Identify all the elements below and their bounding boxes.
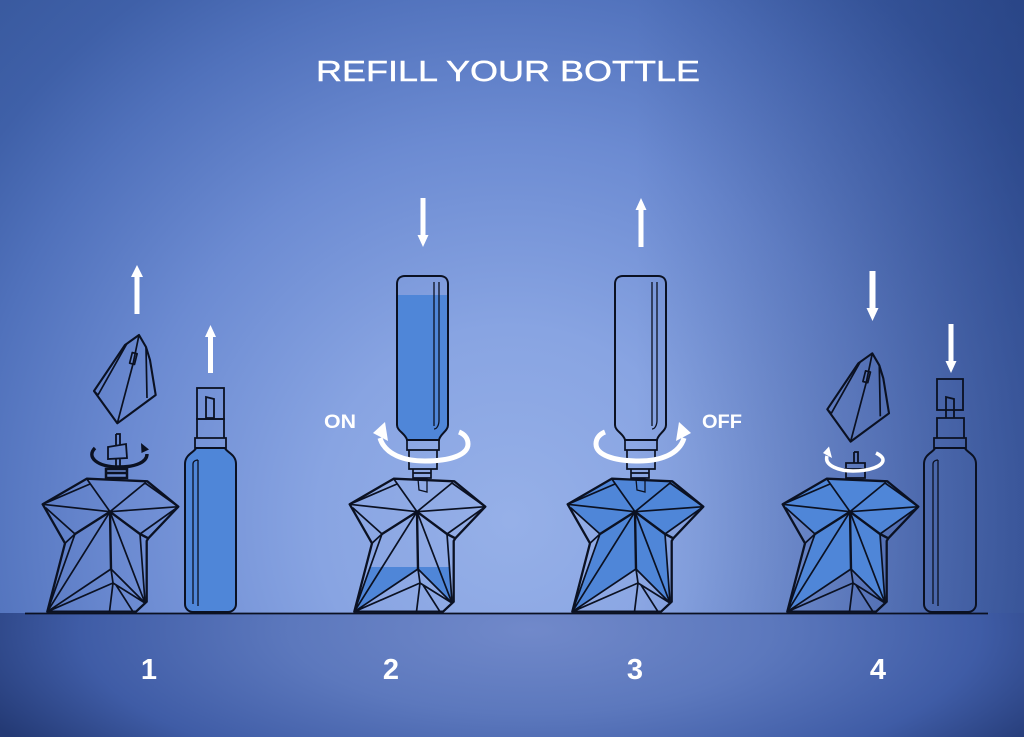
floor	[0, 613, 1024, 737]
tall bottle full	[185, 388, 236, 612]
number 2: 2	[383, 654, 399, 686]
rotation arrow	[823, 446, 883, 471]
title: REFILL YOUR BOTTLE	[316, 56, 700, 88]
arrow: cap moves down	[866, 271, 878, 321]
step 3	[568, 198, 742, 686]
arrow: bottle moves up	[636, 198, 646, 247]
step 4	[783, 271, 976, 686]
rotation arrow on	[373, 422, 468, 461]
icon: star cap	[94, 335, 156, 423]
label: on: ON	[324, 412, 356, 433]
inverted refill bottle	[397, 276, 448, 492]
star bottle full	[568, 479, 703, 612]
rotation arrow off	[596, 422, 691, 461]
spout	[844, 452, 866, 478]
number 1: 1	[141, 654, 157, 686]
star bottle full	[783, 479, 918, 612]
icon: star cap	[827, 353, 889, 442]
number 4: 4	[870, 654, 886, 686]
spout and rotation arrow	[92, 434, 149, 478]
step 1	[43, 265, 236, 612]
inverted empty bottle	[615, 276, 666, 492]
arrow: bottle moves down	[418, 198, 428, 247]
arrow: cap lifts up	[131, 265, 143, 314]
step 2	[324, 198, 485, 686]
star bottle with liquid	[350, 479, 485, 612]
number 3: 3	[627, 654, 643, 686]
tall bottle	[924, 379, 976, 612]
star bottle empty	[43, 479, 178, 612]
label: off: OFF	[702, 412, 742, 433]
arrow: pump moves down	[946, 324, 956, 373]
arrow: pump lifts up	[205, 325, 216, 373]
